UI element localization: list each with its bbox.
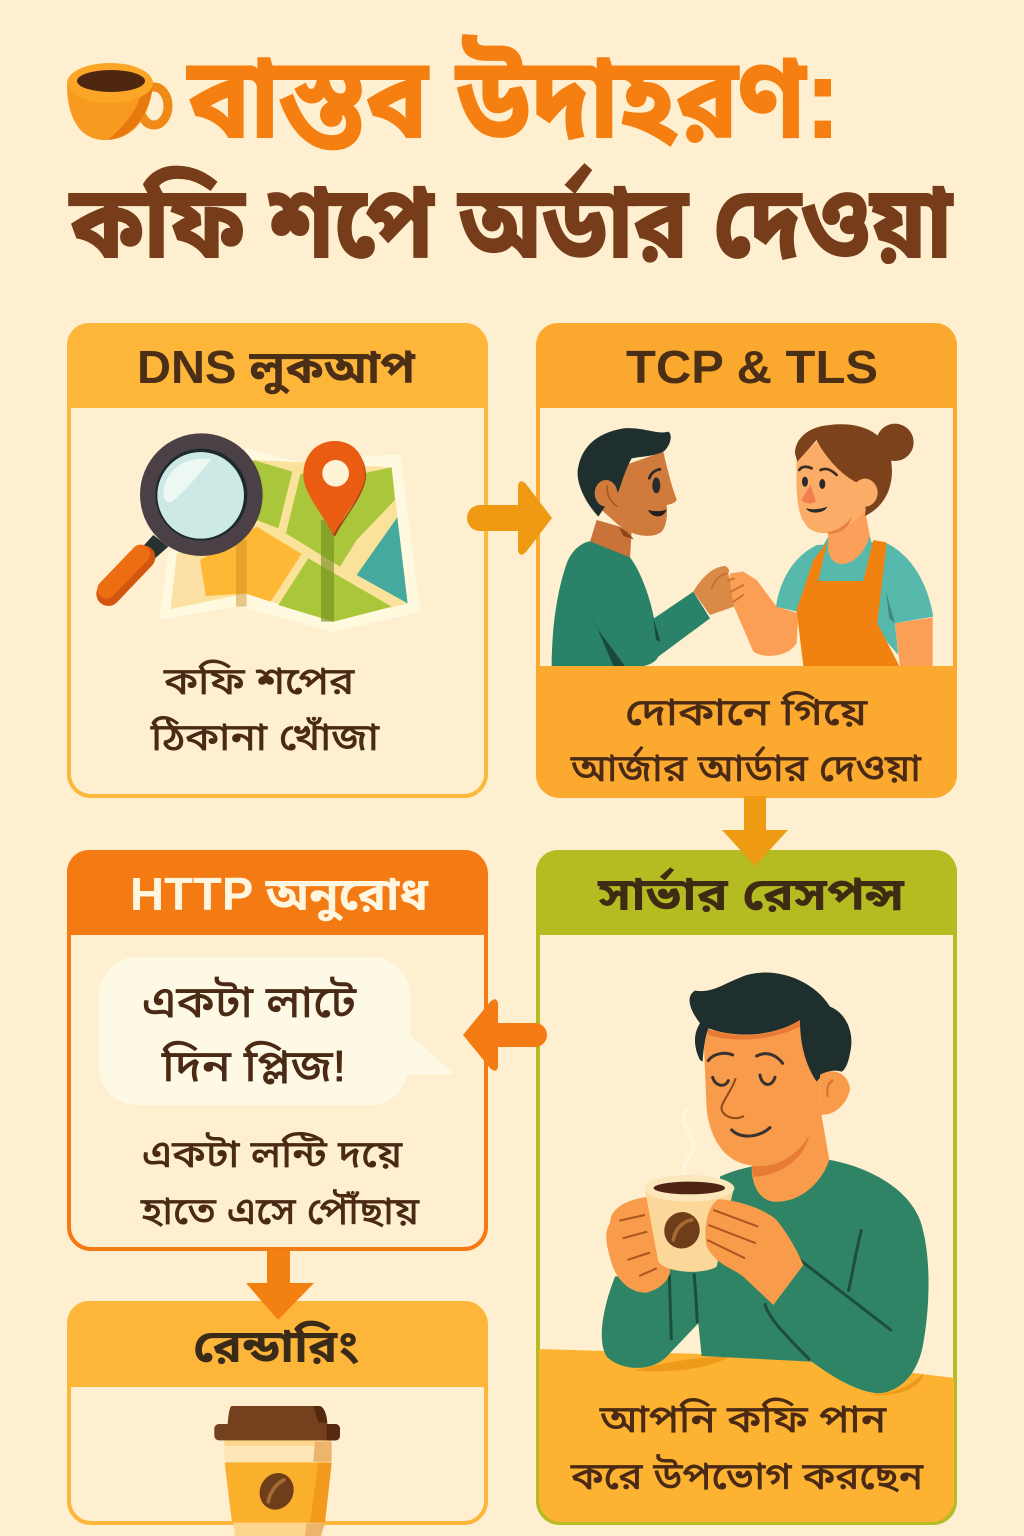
panel header: DNS lookup	[67, 323, 487, 408]
illustration: man drinking coffee	[602, 973, 929, 1395]
panel: rendering	[67, 1301, 487, 1536]
panel header: TCP and TLS	[536, 323, 957, 408]
panel: server response	[536, 850, 957, 1523]
neck and face	[752, 1107, 829, 1202]
text: DNS description	[150, 659, 380, 759]
text: response description	[570, 1397, 924, 1498]
icon: coffee cup	[67, 63, 168, 140]
arrow: TCP to server response	[722, 796, 788, 866]
text: DNS description: কফি শপের	[163, 659, 355, 703]
text: TCP description	[570, 690, 922, 790]
steam	[683, 1110, 694, 1173]
cup	[645, 1190, 733, 1272]
caption band: TCP and TLS	[536, 666, 957, 797]
title line 1: বাস্তব উদাহরণ:	[186, 34, 840, 161]
heading: server response: সার্ভার রেসপন্স	[597, 867, 905, 920]
text: TCP description: দোকানে গিয়ে	[625, 690, 868, 734]
man	[590, 520, 632, 558]
text: TCP description: আর্জার আর্ডার দেওয়া	[570, 745, 922, 790]
title line 2: কফি শপে অর্ডার দেওয়া	[69, 164, 954, 279]
illustration: handshake	[552, 424, 933, 667]
panel: HTTP request	[67, 850, 487, 1249]
right hand	[705, 1199, 803, 1305]
panel: DNS lookup	[67, 323, 487, 796]
panel header: server response	[536, 850, 957, 935]
text: response description: আপনি কফি পান	[599, 1397, 887, 1441]
heading: DNS lookup: DNS লুকআপ	[137, 341, 416, 395]
heading: TCP and TLS: TCP & TLS	[626, 341, 878, 393]
torso and arms	[602, 1159, 929, 1393]
table shadows	[633, 1357, 923, 1395]
speech bubble	[99, 957, 454, 1105]
panel: TCP and TLS	[536, 323, 957, 797]
text: HTTP description: একটা লন্টি দয়ে	[142, 1132, 403, 1176]
barista	[730, 572, 798, 656]
arrow: server response to HTTP	[463, 999, 547, 1071]
heading: rendering: রেন্ডারিং	[193, 1320, 359, 1372]
text: HTTP description: হাতে এসে পৌঁছায়	[140, 1189, 420, 1233]
left hand	[606, 1193, 670, 1293]
heading: HTTP request: HTTP অনুরোধ	[130, 868, 429, 922]
text: DNS description: ঠিকানা খোঁজা	[150, 715, 380, 759]
text: HTTP description	[140, 1132, 420, 1233]
arrow: DNS to TCP	[467, 481, 552, 555]
speech bubble: দিন প্লিজ!	[161, 1040, 346, 1091]
table and caption band	[539, 1349, 954, 1522]
illustration: map and magnifier	[107, 433, 421, 632]
panel header: rendering	[67, 1301, 487, 1387]
panel header: HTTP request	[67, 850, 487, 935]
illustration: takeaway cup	[214, 1406, 340, 1536]
arrow: HTTP to rendering	[246, 1250, 314, 1320]
speech bubble: একটা লাটে	[142, 976, 357, 1027]
text: response description: করে উপভোগ করছেন	[570, 1454, 924, 1498]
